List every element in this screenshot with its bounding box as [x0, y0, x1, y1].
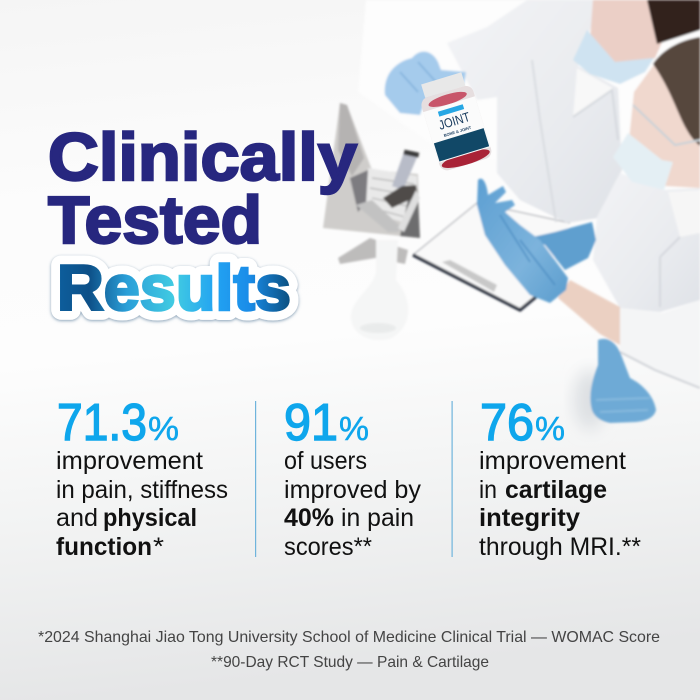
stat: 76%	[479, 394, 641, 561]
bottle cap	[421, 72, 465, 98]
description	[284, 447, 422, 561]
description: improvement	[479, 447, 626, 475]
laptop	[323, 103, 420, 238]
number: 71.3	[57, 394, 147, 452]
photo: lab scientists at table	[323, 0, 700, 430]
microscope	[338, 150, 420, 264]
stat: 71.3%	[56, 394, 228, 561]
supplement bottle	[415, 70, 493, 172]
description: cartilage	[505, 476, 607, 504]
footnotes: *2024 Shanghai Jiao Tong University School of Medicine Clinical Trial — WOMAC Score	[38, 629, 660, 646]
bottle body	[419, 84, 493, 172]
title line: Tested: Tested	[48, 183, 262, 258]
description: 40%	[284, 504, 334, 532]
description: integrity	[479, 504, 580, 532]
title	[48, 120, 357, 324]
description: through MRI.**	[479, 533, 641, 561]
front scientist head	[613, 37, 700, 190]
glove: writing hand	[528, 222, 596, 270]
divider	[255, 401, 256, 557]
divider	[452, 401, 453, 557]
number: 91	[284, 394, 338, 452]
back wall	[358, 0, 700, 200]
supplement bottle: JOINT	[437, 109, 472, 133]
description	[479, 447, 641, 561]
description: scores**	[284, 533, 372, 561]
title sticker: Results: Results	[57, 252, 291, 324]
arm	[558, 280, 620, 345]
description: in pain	[341, 504, 414, 532]
back scientist head	[573, 0, 700, 84]
back scientist coat	[447, 0, 622, 223]
number	[480, 394, 565, 452]
number: %	[148, 410, 179, 447]
description: improvement	[56, 447, 203, 475]
number: 76	[480, 394, 534, 452]
title sticker: Results: Results	[57, 252, 291, 324]
clipboard	[413, 203, 570, 312]
description: and	[56, 504, 98, 532]
description: *	[153, 533, 164, 561]
description: function	[56, 533, 152, 561]
description: physical	[103, 504, 197, 532]
description: in	[479, 476, 497, 504]
bottle label	[423, 96, 490, 163]
description: in pain, stiffness	[56, 476, 228, 504]
number	[284, 394, 369, 452]
description	[56, 447, 228, 561]
description: improved by	[284, 476, 422, 504]
number: %	[535, 410, 565, 447]
flask	[351, 240, 408, 340]
title line: Clinically: Clinically	[48, 120, 357, 195]
footnotes: **90-Day RCT Study — Pain & Cartilage	[211, 654, 489, 671]
number: %	[339, 410, 369, 447]
front scientist coat	[593, 173, 700, 388]
glove: raised hand	[477, 179, 568, 303]
stat: 91%	[284, 394, 422, 561]
footnotes	[38, 629, 660, 671]
glove: holding bottle	[385, 52, 466, 115]
description: of users	[284, 447, 367, 475]
glove: resting hand	[574, 339, 656, 430]
supplement bottle: BONE & JOINT	[443, 125, 472, 138]
